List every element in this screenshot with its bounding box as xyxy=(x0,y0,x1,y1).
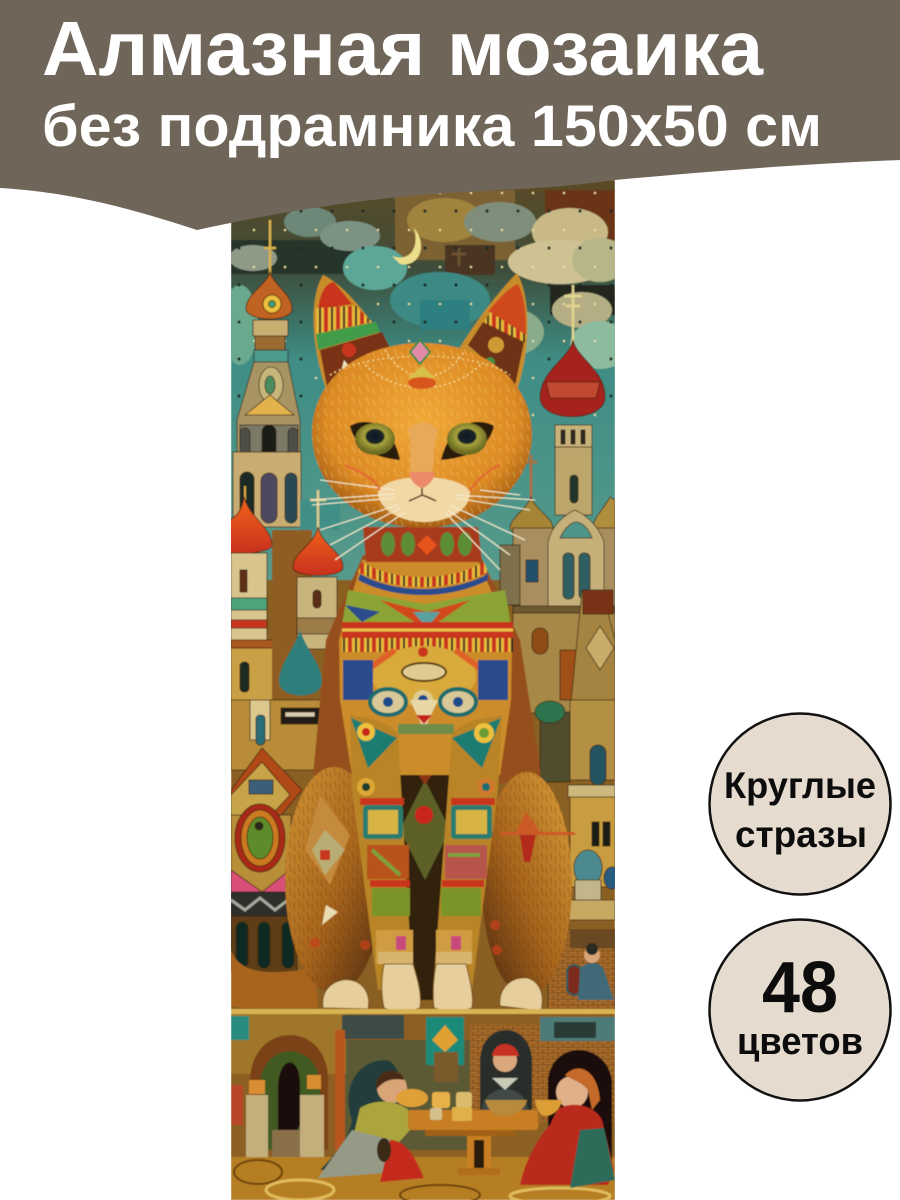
left arch with door xyxy=(231,1035,328,1160)
clouds xyxy=(222,198,630,369)
left eye xyxy=(350,422,400,460)
right church xyxy=(500,510,615,613)
girl on the right xyxy=(520,1050,615,1188)
collar xyxy=(363,527,482,562)
badge: 48 colours xyxy=(710,920,890,1100)
sky background xyxy=(231,180,615,580)
right ear xyxy=(457,273,528,390)
lower right buildings xyxy=(513,590,620,1012)
title: Алмазная мозаика xyxy=(42,6,764,92)
right eye xyxy=(441,422,494,460)
base painting tone xyxy=(231,579,615,1010)
ornate torso xyxy=(339,527,513,775)
center chest dark strip xyxy=(400,774,450,1000)
second orange dome tower xyxy=(293,490,343,649)
tail xyxy=(231,950,318,1008)
cross in the sky xyxy=(452,248,466,266)
middle brown wall xyxy=(272,530,312,700)
right haunch xyxy=(482,772,575,996)
stars and dots texture xyxy=(231,190,615,420)
paws xyxy=(323,964,542,1011)
header banner xyxy=(0,0,900,230)
small seated figure xyxy=(570,930,615,1000)
floor xyxy=(231,1157,615,1200)
lower left buildings xyxy=(231,700,321,972)
badge: 48 colours: цветов xyxy=(737,1021,863,1063)
lower scene background xyxy=(231,1014,615,1150)
nose xyxy=(410,472,434,488)
table and cups xyxy=(396,1089,538,1175)
badge: round rhinestones: Круглые xyxy=(724,765,876,806)
badge: round rhinestones: стразы xyxy=(735,814,867,855)
teal onion dome xyxy=(279,630,322,696)
cat head xyxy=(312,340,535,570)
right front leg xyxy=(433,715,502,990)
left haunch xyxy=(284,766,373,991)
left front leg xyxy=(350,715,413,990)
whiskers xyxy=(312,480,535,570)
platform ledge xyxy=(231,1009,615,1014)
left tower with orange dome xyxy=(233,220,301,527)
panel: diamond painting artwork xyxy=(222,180,630,1200)
badge: 48 colours: 48 xyxy=(762,948,838,1028)
left red dome tower xyxy=(231,485,273,708)
body back strips xyxy=(313,555,541,790)
teal wall behind towers xyxy=(300,500,340,530)
subtitle: без подрамника 150х50 см xyxy=(42,94,822,159)
dark night sky blocks xyxy=(231,190,615,315)
muzzle xyxy=(378,477,470,522)
left ear xyxy=(314,275,392,392)
right gold domes xyxy=(510,455,615,536)
badge: round rhinestones xyxy=(710,714,890,894)
right red onion dome tower xyxy=(540,285,605,515)
woman on the left xyxy=(318,1060,424,1182)
icon: crescent moon xyxy=(392,228,421,264)
boy in arch xyxy=(480,1030,532,1110)
